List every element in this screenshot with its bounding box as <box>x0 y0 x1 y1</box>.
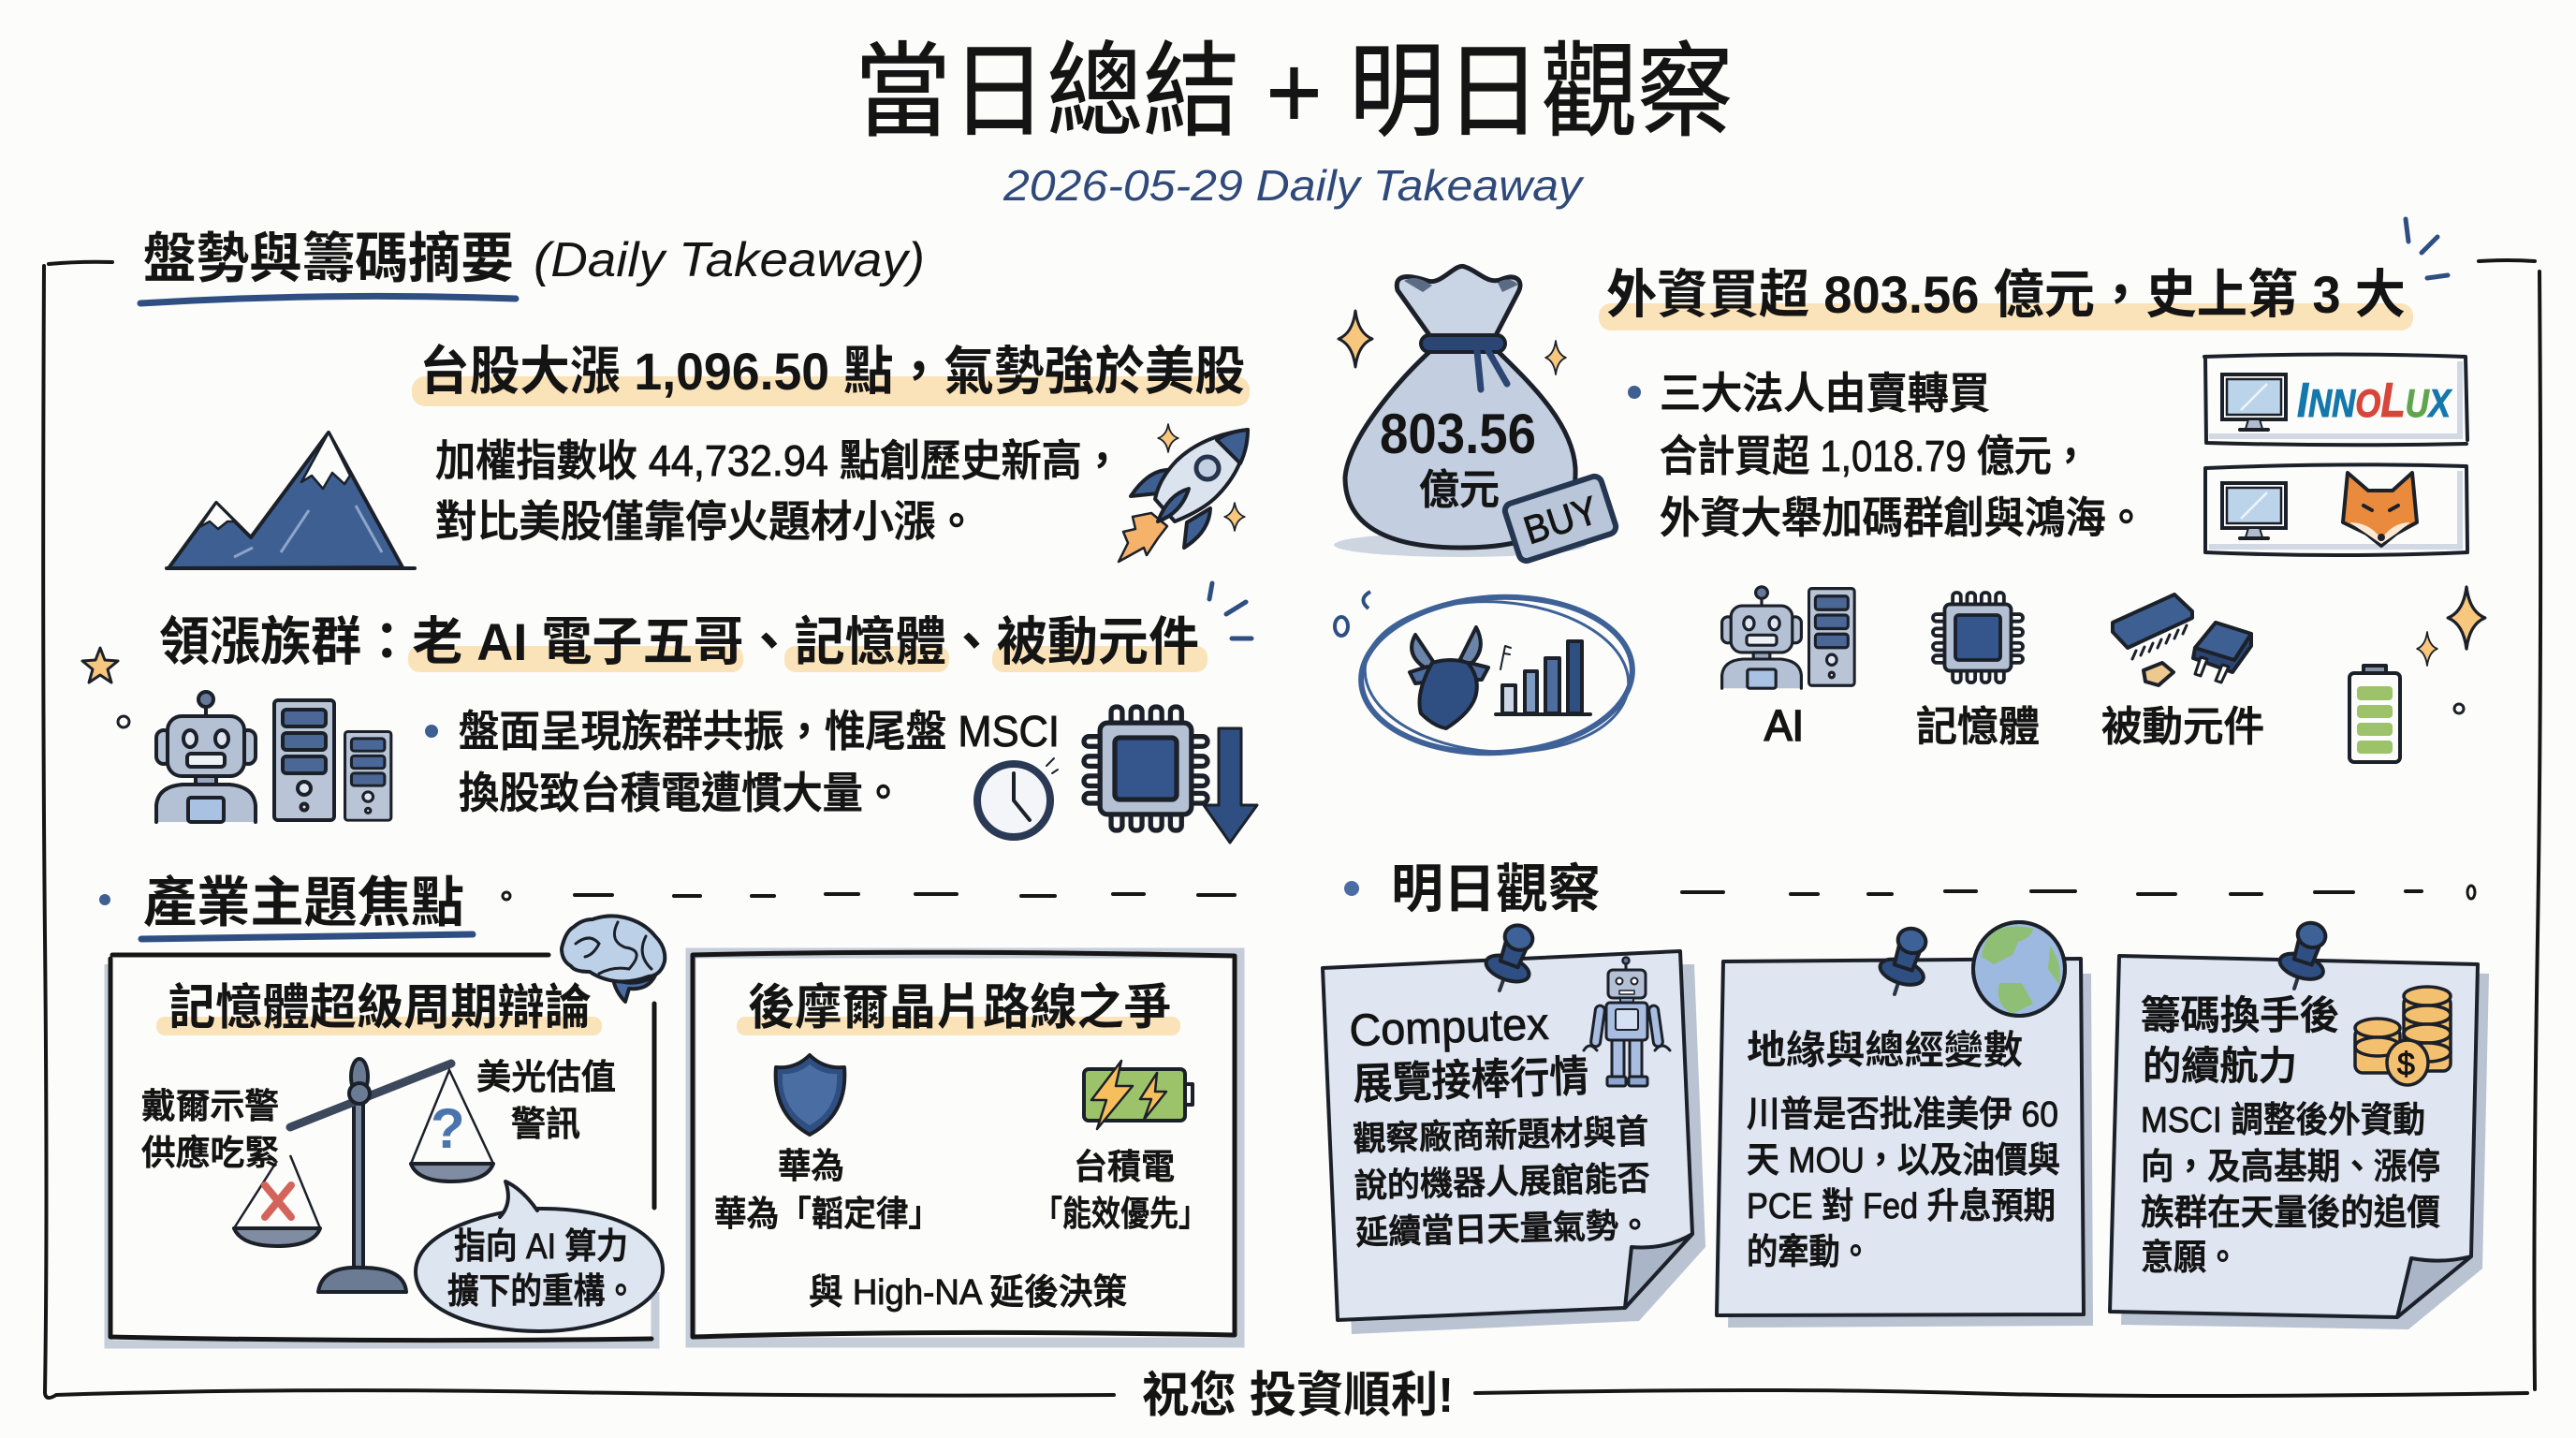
closing message: 祝您 投資順利! <box>1142 1369 1454 1423</box>
outer frame <box>43 260 2540 1398</box>
icon: pushpin <box>1478 918 1544 998</box>
note body: 川普是否批准美伊 60 <box>1747 1095 2058 1135</box>
heading: daily takeaway: 盤勢與籌碼摘要 <box>143 228 514 289</box>
note heading: Computex <box>1349 1000 1549 1056</box>
labels: Dell warning <box>141 1087 279 1172</box>
icon: globe <box>1973 922 2065 1016</box>
labels: Micron valuation <box>476 1058 616 1143</box>
title: 當日總結 + 明日觀察 <box>855 35 1734 150</box>
icon: brain <box>562 916 665 1002</box>
text: index close <box>435 436 1122 546</box>
note heading: 展覽接棒行情 <box>1353 1051 1589 1108</box>
icon: full battery <box>2349 666 2400 762</box>
note body: 觀察廠商新題材與首 <box>1353 1112 1649 1158</box>
icon: bull with rising bars <box>1335 591 1636 761</box>
icon with label: AI: AI <box>1764 701 1804 750</box>
icon: money bag: BUY <box>1518 488 1603 552</box>
logo card: Innolux <box>2204 354 2467 445</box>
text: Huawei <box>714 1147 941 1233</box>
icon: rocket <box>1119 424 1248 562</box>
icon: money bag: 803.56 <box>1380 403 1536 465</box>
text: TSMC: 台積電 <box>1074 1148 1175 1186</box>
heading: post-Moore route contest: 後摩爾晶片路線之爭 <box>748 981 1171 1035</box>
note heading <box>2141 993 2339 1088</box>
icon: standing robot <box>1584 957 1670 1086</box>
panel: daily takeaway <box>82 228 1257 843</box>
section: industry themes <box>99 873 1239 1344</box>
headline: index surge: 台股大漲 1,096.50 點，氣勢強於美股 <box>419 342 1245 401</box>
heading: industry themes: 產業主題焦點 <box>143 873 464 933</box>
panel: memory supercycle <box>109 916 665 1344</box>
icon with label: memory <box>1916 593 2040 750</box>
note: Computex <box>1323 918 1705 1334</box>
panel: foreign investors <box>1334 219 2485 762</box>
icon with label: AI <box>1722 587 1854 750</box>
icon with label: memory: 記憶體 <box>1916 704 2040 750</box>
text: TSMC: 「能效優先」 <box>1033 1195 1208 1233</box>
text: institutional flows <box>1628 369 2146 542</box>
callout: AI compute restructuring: 指向 AI 算力 <box>454 1227 628 1267</box>
text: institutional flows: 外資大舉加碼群創與鴻海。 <box>1660 493 2146 542</box>
decorative sparks <box>2406 219 2448 278</box>
text: High-NA decision: 與 High-NA 延後決策 <box>809 1273 1127 1313</box>
note body: PCE 對 Fed 升息預期 <box>1747 1187 2056 1226</box>
heading: memory supercycle debate: 記憶體超級周期辯論 <box>168 981 592 1035</box>
note body: 族群在天量後的追價 <box>2141 1194 2440 1233</box>
text: institutional flows: 合計買超 1,018.79 億元， <box>1660 432 2089 480</box>
note body: 向，及高基期、漲停 <box>2141 1148 2440 1187</box>
callout: AI compute restructuring: 擴下的重構。 <box>447 1272 637 1312</box>
note heading <box>1349 998 1589 1108</box>
note body: 的牽動。 <box>1747 1233 1871 1272</box>
note body: 意願。 <box>2141 1239 2239 1278</box>
icon: money bag: 億元 <box>1419 467 1500 513</box>
icon: robot and servers <box>156 692 391 822</box>
text: sector resonance: 盤面呈現族群共振，惟尾盤 MSCI <box>459 707 1060 756</box>
heading: daily takeaway <box>140 228 925 303</box>
callout: AI compute restructuring <box>416 1181 663 1331</box>
note body <box>2141 1101 2440 1278</box>
text: Huawei: 華為 <box>778 1147 844 1185</box>
icon: balance scale: ? <box>431 1097 465 1160</box>
icon with label: passive components: 被動元件 <box>2101 704 2264 750</box>
labels: Dell warning: 供應吃緊 <box>141 1134 279 1172</box>
note body <box>1747 1095 2060 1272</box>
icon: pushpin <box>2273 917 2336 995</box>
headline: leading sectors: 領漲族群：老 AI 電子五哥、記憶體、被動元件 <box>159 612 1199 671</box>
note body: MSCI 調整後外資動 <box>2141 1101 2425 1140</box>
dollar sign: $ <box>2397 1047 2415 1082</box>
icon: battery with lightning <box>1084 1061 1193 1129</box>
note heading: 籌碼換手後 <box>2141 993 2339 1037</box>
decorative sparkles <box>2417 587 2485 713</box>
logo card: Foxconn <box>2205 464 2467 555</box>
panel: post-Moore chip routes <box>691 952 1239 1343</box>
heading: industry themes <box>99 873 1235 939</box>
text: sector resonance <box>425 707 1060 817</box>
heading: tomorrow watch <box>1344 859 2475 918</box>
note body <box>1353 1112 1652 1252</box>
text: index close: 對比美股僅靠停火題材小漲。 <box>435 497 977 546</box>
text: institutional flows: 三大法人由賣轉買 <box>1660 369 1990 418</box>
logo card: Innolux: INNOLUX <box>2297 374 2452 428</box>
text: TSMC <box>1033 1148 1208 1233</box>
icon: mountain <box>167 433 415 568</box>
note heading: 的續航力 <box>2143 1044 2297 1088</box>
icon: balance scale <box>234 1059 493 1292</box>
section: tomorrow watch <box>1323 859 2489 1334</box>
icon with label: passive components <box>2101 594 2264 750</box>
icon: pushpin <box>1873 922 1937 1001</box>
note body: 說的機器人展館能否 <box>1354 1159 1650 1205</box>
headline: foreign net buy: 外資買超 803.56 億元，史上第 3 大 <box>1606 265 2406 324</box>
note: chip rotation <box>2110 917 2489 1329</box>
icon: money bag <box>1334 266 1617 563</box>
icon: shield <box>776 1055 844 1135</box>
note body: 天 MOU，以及油價與 <box>1747 1141 2060 1181</box>
note body: 延續當日天量氣勢。 <box>1355 1206 1652 1252</box>
labels: Dell warning: 戴爾示警 <box>141 1087 279 1125</box>
note heading: 地緣與總經變數 <box>1747 1028 2023 1072</box>
icon: gold coins <box>2355 987 2451 1085</box>
decorative sparks <box>82 583 1251 727</box>
text: Huawei: 華為「韜定律」 <box>714 1195 941 1233</box>
icon: clock <box>977 758 1058 837</box>
text: index close: 加權指數收 44,732.94 點創歷史新高， <box>435 436 1122 485</box>
heading: tomorrow watch: 明日觀察 <box>1391 859 1601 918</box>
icon: chip with down arrow <box>1084 707 1257 843</box>
subtitle: date: 2026-05-29 Daily Takeaway <box>1003 161 1585 210</box>
text: sector resonance: 換股致台積電遭慣大量。 <box>459 769 903 817</box>
heading: daily takeaway: (Daily Takeaway) <box>534 233 925 287</box>
labels: Micron valuation: 警訊 <box>511 1105 580 1143</box>
labels: Micron valuation: 美光估值 <box>476 1058 616 1096</box>
note: geopolitics and macro <box>1717 922 2093 1328</box>
